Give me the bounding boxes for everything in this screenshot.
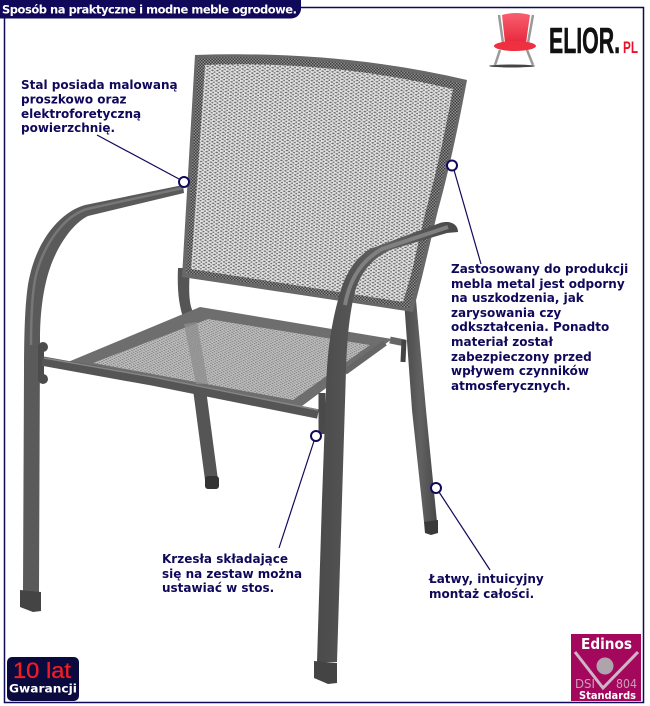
callout: durable metal: odkształcenia. Ponadto <box>451 320 609 334</box>
logo: Elior.pl <box>489 13 638 68</box>
callout: durable metal: mebla metal jest odporny <box>451 277 625 291</box>
left front foot <box>20 590 41 612</box>
callout: stackable chairs <box>162 431 321 595</box>
rear left foot <box>205 476 219 489</box>
callout: durable metal: wpływem czynników <box>451 364 589 378</box>
icon: red chair <box>489 13 536 68</box>
rear right foot <box>424 520 438 535</box>
rear right leg <box>404 300 437 522</box>
callout: easy assembly <box>428 483 544 601</box>
badge: 10 years warranty: 10 lat <box>13 658 71 683</box>
callout: durable metal: atmosferycznych. <box>451 379 571 393</box>
callout: durable metal: zabezpieczony przed <box>451 350 592 364</box>
callout: powder-coated steel: powierzchnię. <box>21 121 115 135</box>
callout: durable metal: na uszkodzenia, jak <box>451 291 585 305</box>
backrest <box>182 54 467 312</box>
right arm and front leg <box>317 222 458 662</box>
badge: Edinos standards: DSI <box>575 676 595 691</box>
right bracket <box>318 393 326 434</box>
badge: Edinos standards: 804 <box>616 676 637 691</box>
badge: Edinos standards: Standards <box>579 689 636 702</box>
callout: easy assembly: Łatwy, intuicyjny <box>428 572 544 586</box>
badge: Edinos standards: Edinos <box>581 635 632 653</box>
callout: easy assembly: montaż całości. <box>429 587 534 601</box>
left arm and front leg <box>23 185 184 592</box>
callout: durable metal: Zastosowany do produkcji <box>451 262 628 276</box>
callout: stackable chairs: ustawiać w stos. <box>162 581 274 595</box>
callout: stackable chairs: Krzesła składające <box>162 552 288 566</box>
badge: 10 years warranty <box>7 657 79 701</box>
title banner: Sposób na praktyczne i modne meble ogrodowe. <box>2 2 297 16</box>
badge: Edinos standards <box>571 634 641 702</box>
rear left leg <box>178 268 218 480</box>
seat <box>68 307 405 406</box>
left bracket <box>38 342 48 384</box>
callout: durable metal: zarysowania czy <box>451 306 561 320</box>
badge: 10 years warranty: Gwarancji <box>9 682 77 696</box>
callout: powder-coated steel <box>21 78 189 187</box>
front seat bar <box>42 358 318 414</box>
callout: powder-coated steel: elektroforetyczną <box>21 107 141 121</box>
callout: powder-coated steel: proszkowo oraz <box>21 92 127 106</box>
callout: durable metal: materiał został <box>451 335 553 349</box>
callout: durable metal <box>447 160 628 393</box>
chair illustration <box>20 54 467 684</box>
callout: stackable chairs: się na zestaw można <box>162 567 302 581</box>
callout: powder-coated steel: Stal posiada malowaną <box>21 78 178 92</box>
right front foot <box>314 661 337 684</box>
logo: Elior.pl: PL <box>623 38 638 57</box>
